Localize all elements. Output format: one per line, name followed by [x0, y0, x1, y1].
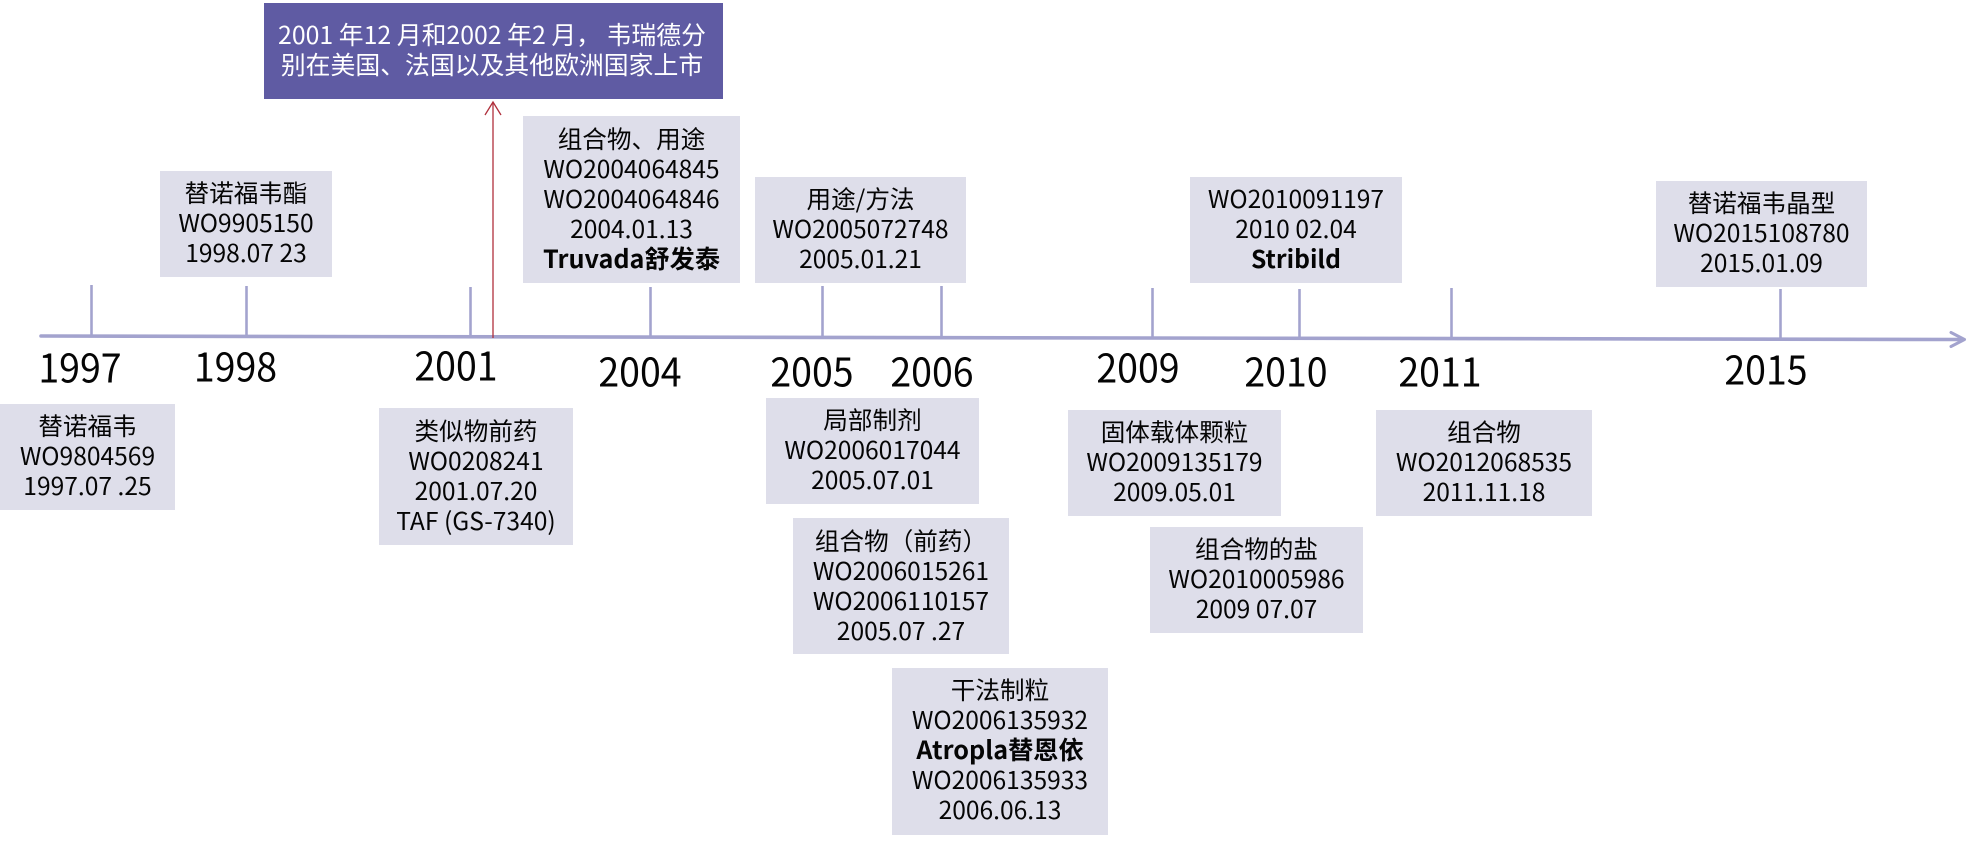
patent box: analog prodrug 2001: 类似物前药: [414, 412, 537, 448]
patent box: topical formulation 2005: [766, 398, 979, 504]
patent box: dry granulation 2006: Atropla替恩依: [916, 731, 1084, 767]
year label 2006: 2006: [890, 340, 974, 398]
patent box: Stribild 2010: WO2010091197: [1208, 180, 1384, 216]
patent box: composition and use 2004: WO2004064845: [543, 150, 720, 186]
patent box: composition prodrug 2005: 组合物（前药）: [815, 522, 987, 558]
patent box: tenofovir 1997: 替诺福韦: [38, 406, 137, 442]
year label 1998: 1998: [194, 335, 277, 393]
patent box: tenofovir 1997: [0, 404, 175, 510]
year label 2011: 2011: [1398, 340, 1482, 398]
patent box: dry granulation 2006: WO2006135932: [912, 701, 1088, 737]
year tick marks: [92, 285, 1780, 340]
patent box: topical formulation 2005: 局部制剂: [823, 400, 922, 436]
patent box: solid carrier particles 2009: WO2009135179: [1086, 442, 1263, 478]
axis line with arrowhead: [41, 332, 1964, 346]
patent box: tenofovir ester 1998: 替诺福韦酯: [184, 174, 307, 210]
patent box: crystal form 2015: [1656, 181, 1867, 287]
patent box: composition salt 2009: 2009 07.07: [1196, 590, 1317, 626]
patent box: tenofovir ester 1998: WO9905150: [178, 204, 314, 240]
year label 2001: 2001: [414, 334, 498, 392]
patent box: composition 2011: [1376, 410, 1592, 516]
patent box: crystal form 2015: 2015.01.09: [1700, 244, 1823, 280]
year label 2004: 2004: [598, 340, 682, 398]
red arrow to launch callout: [485, 102, 501, 338]
patent box: analog prodrug 2001: WO0208241: [408, 442, 544, 478]
patent box: composition and use 2004: Truvada舒发泰: [543, 240, 720, 276]
patent box: dry granulation 2006: [892, 668, 1108, 835]
patent box: Stribild 2010: [1190, 177, 1402, 283]
patent box: composition and use 2004: WO2004064846: [543, 180, 720, 216]
patent box: dry granulation 2006: 干法制粒: [951, 671, 1049, 707]
year label 2009: 2009: [1096, 336, 1180, 394]
patent box: Stribild 2010: 2010 02.04: [1235, 210, 1357, 246]
patent box: analog prodrug 2001: 2001.07.20: [415, 472, 537, 508]
patent box: analog prodrug 2001: TAF (GS-7340): [396, 502, 556, 538]
patent box: tenofovir 1997: 1997.07 .25: [23, 466, 152, 502]
patent box: composition and use 2004: 2004.01.13: [570, 210, 693, 246]
patent box: tenofovir ester 1998: 1998.07 23: [185, 234, 307, 270]
year label 2010: 2010: [1244, 340, 1328, 398]
patent box: composition and use 2004: [523, 116, 740, 283]
patent box: analog prodrug 2001: [379, 408, 573, 545]
patent box: composition prodrug 2005: 2005.07 .27: [837, 612, 965, 648]
patent box: topical formulation 2005: 2005.07.01: [811, 460, 934, 496]
year label 2005: 2005: [770, 340, 854, 398]
patent box: composition prodrug 2005: WO2006110157: [813, 582, 989, 618]
year label 2015: 2015: [1724, 338, 1808, 396]
patent box: composition salt 2009: [1150, 527, 1363, 633]
patent box: solid carrier particles 2009: [1068, 410, 1281, 516]
year label 1997: 1997: [38, 336, 122, 394]
patent box: crystal form 2015: WO2015108780: [1673, 214, 1850, 250]
patent box: dry granulation 2006: 2006.06.13: [939, 791, 1061, 827]
patent box: composition salt 2009: WO2010005986: [1168, 560, 1345, 596]
patent box: composition salt 2009: 组合物的盐: [1195, 530, 1318, 566]
patent box: Stribild 2010: Stribild: [1251, 240, 1341, 276]
patent box: crystal form 2015: 替诺福韦晶型: [1688, 184, 1835, 220]
patent box: solid carrier particles 2009: 固体载体颗粒: [1101, 412, 1248, 448]
patent box: use and method 2005: 2005.01.21: [799, 240, 922, 276]
callout: market launch: 别在美国、法国以及其他欧洲国家上市: [281, 46, 703, 82]
patent box: tenofovir 1997: WO9804569: [20, 436, 155, 472]
patent box: use and method 2005: WO2005072748: [772, 210, 949, 246]
patent box: solid carrier particles 2009: 2009.05.01: [1113, 472, 1236, 508]
callout: market launch: 2001 年12 月和2002 年2 月， 韦瑞德分: [278, 16, 706, 52]
patent box: dry granulation 2006: WO2006135933: [912, 761, 1088, 797]
patent box: composition 2011: 组合物: [1447, 412, 1521, 448]
patent box: composition 2011: 2011.11.18: [1423, 472, 1545, 508]
patent box: topical formulation 2005: WO2006017044: [784, 430, 961, 466]
patent box: use and method 2005: 用途/方法: [806, 180, 915, 216]
patent box: tenofovir ester 1998: [160, 171, 332, 277]
patent box: use and method 2005: [755, 177, 966, 283]
patent box: composition 2011: WO2012068535: [1396, 442, 1572, 478]
patent box: composition and use 2004: 组合物、用途: [558, 120, 705, 156]
callout: market launch: [264, 3, 723, 99]
patent box: composition prodrug 2005: [793, 518, 1009, 654]
patent box: composition prodrug 2005: WO2006015261: [813, 552, 989, 588]
